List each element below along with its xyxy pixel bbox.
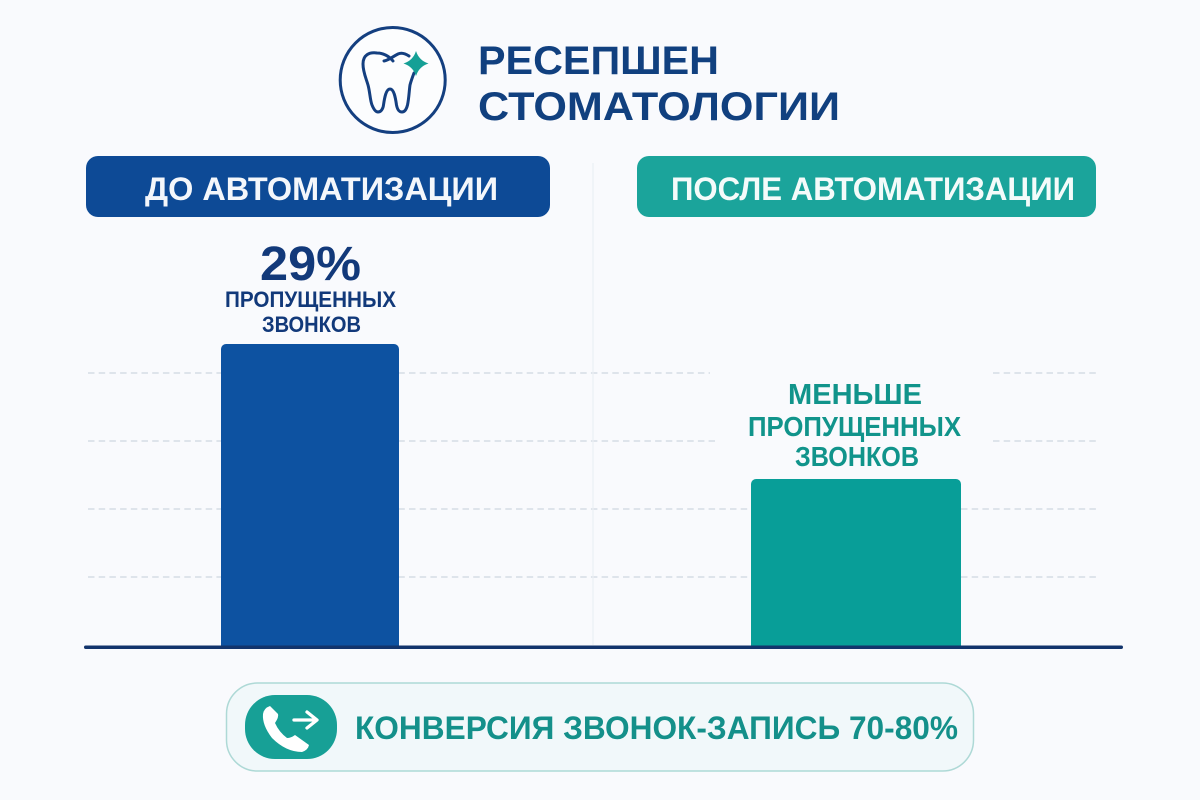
stat: 29 percent missed calls: ЗВОНКОВ: [262, 312, 361, 337]
stat: 29 percent missed calls: ПРОПУЩЕННЫХ: [225, 287, 396, 312]
stat: fewer missed calls: [748, 379, 962, 472]
icon: tooth with sparkle: [340, 28, 445, 132]
callout: call to booking conversion: [226, 683, 974, 771]
chart baseline: [84, 646, 1123, 649]
title: РЕСЕПШЕН: [478, 39, 719, 83]
icon: phone with arrow: [245, 695, 337, 759]
stat: fewer missed calls: ПРОПУЩЕННЫХ: [748, 411, 962, 442]
stat: fewer missed calls: ЗВОНКОВ: [795, 441, 919, 472]
panel header: after automation: [637, 156, 1096, 217]
panel header: before automation: ДО АВТОМАТИЗАЦИИ: [145, 171, 498, 207]
stat: fewer missed calls: МЕНЬШЕ: [788, 379, 922, 411]
bar: before: [221, 344, 399, 647]
panel header: after automation: ПОСЛЕ АВТОМАТИЗАЦИИ: [671, 171, 1075, 207]
stat: 29 percent missed calls: 29%: [260, 238, 361, 291]
panel header: before automation: [86, 156, 550, 217]
callout: call to booking conversion: КОНВЕРСИЯ ЗВОНОК-ЗАПИСЬ 70-80%: [355, 710, 958, 746]
title: [478, 39, 840, 129]
bar: after: [751, 479, 961, 647]
stat: 29 percent missed calls: [225, 238, 396, 337]
title: СТОМАТОЛОГИИ: [478, 85, 840, 129]
